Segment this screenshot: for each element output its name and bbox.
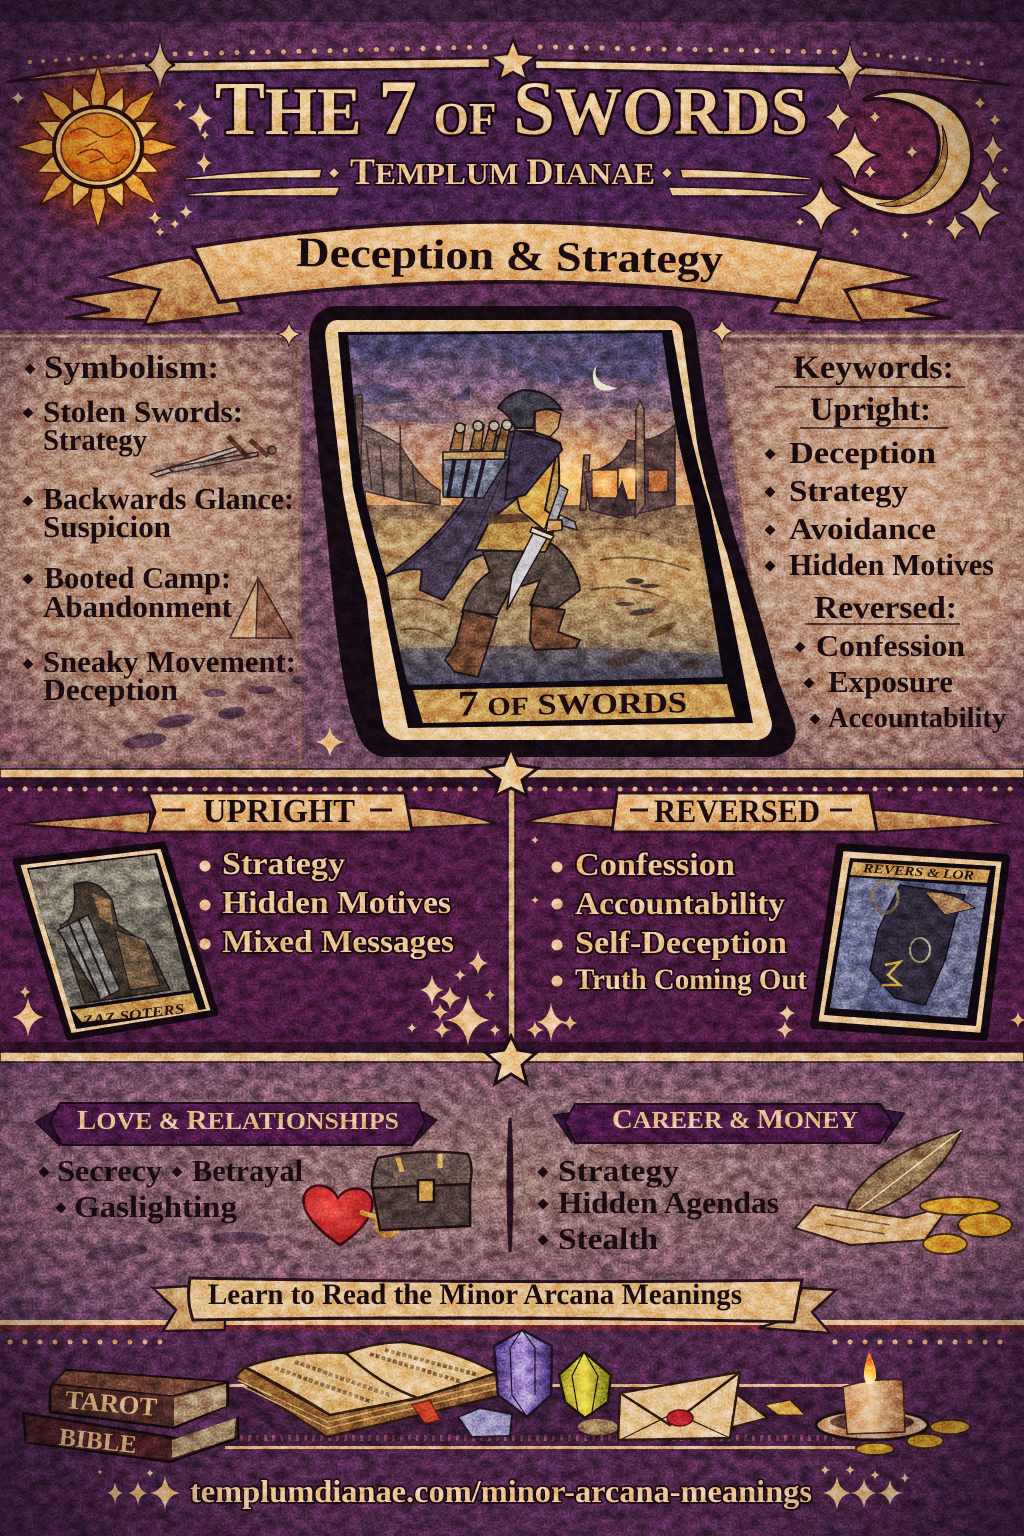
icon: Tarot book: TAROT [64, 1385, 158, 1422]
panel: keywords [709, 318, 1024, 764]
reversed list: Truth Coming Out [575, 963, 807, 996]
url line [97, 1465, 910, 1510]
icon: footprints [122, 676, 308, 751]
hooded figure [60, 882, 170, 1003]
footprints on ground [604, 578, 705, 671]
love banner: LOVE & RELATIONSHIPS [77, 1105, 399, 1135]
footprints [86, 1232, 270, 1263]
icon: gold nuggets [578, 1419, 618, 1435]
sky [348, 333, 695, 510]
reversed list: Self-Deception [575, 924, 787, 960]
icon: sealed envelope [618, 1372, 768, 1440]
career list: Hidden Agendas [558, 1185, 779, 1220]
vertical divider [508, 785, 515, 1043]
upright list: Mixed Messages [222, 923, 454, 959]
icon: small crystal [458, 1408, 512, 1437]
career list: Strategy [558, 1153, 680, 1188]
scarf [505, 430, 562, 500]
icon: crescent moon [795, 55, 1010, 245]
keyword list: Accountability [828, 702, 1006, 734]
crescent moon in sky [593, 365, 618, 390]
keyword list: Strategy [789, 473, 909, 508]
keyword list: Deception [789, 435, 936, 470]
boots [445, 610, 497, 677]
banner: Deception & Strategy [65, 222, 951, 325]
upright subheading: Upright: [810, 392, 931, 428]
upright list [200, 845, 454, 959]
dagger [507, 485, 577, 610]
icon: stolen swords [150, 436, 280, 477]
upright list: Hidden Motives [222, 884, 451, 920]
icon: Tarot book [50, 1370, 228, 1428]
upright list: Strategy [222, 845, 345, 881]
love banner [35, 1103, 437, 1146]
panel: symbolism [0, 321, 345, 763]
symbolism heading: Symbolism: [44, 350, 219, 386]
face and hood [535, 410, 561, 437]
icon: treasure chest [372, 1152, 472, 1230]
card label band [413, 684, 735, 723]
card illustration [340, 330, 730, 690]
url line: templumdianae.com/minor-arcana-meanings [190, 1473, 812, 1509]
banner: Learn to read: Learn to Read the Minor Arcana Meanings [208, 1278, 742, 1311]
symbolism list [43, 394, 296, 707]
reversed banner: REVERSED [654, 794, 820, 830]
icon: quill and coins [795, 1130, 1012, 1254]
upright banner: UPRIGHT [203, 793, 355, 830]
career banner: CAREER & MONEY [612, 1104, 858, 1134]
ground [350, 505, 730, 690]
career banner [553, 1104, 905, 1143]
subtitle: Templum Dianae: TEMPLUM DIANAE [350, 152, 655, 193]
symbolism list: Abandonment [43, 589, 233, 624]
keyword list: Confession [816, 628, 965, 663]
love list: Secrecy [57, 1153, 163, 1188]
icon: gold trinket [765, 1400, 805, 1415]
keyword list: Avoidance [789, 511, 936, 546]
icon: abandoned tent [230, 578, 292, 638]
reversed list: Confession [575, 846, 735, 882]
subtitle: Templum Dianae [185, 152, 812, 196]
sun side sparkles [11, 91, 213, 237]
small card: upright [16, 845, 215, 1037]
icon: candle [816, 1352, 970, 1455]
banner: Learn to read [153, 1278, 836, 1333]
reversed sparkles [526, 836, 1024, 1042]
small card: reversed: REVERS & LOR [861, 860, 975, 883]
reversed list: Accountability [575, 885, 785, 921]
banner: Deception & Strategy: Deception & Strategy [296, 230, 724, 283]
love list: Gaslighting [74, 1189, 238, 1224]
icon: sun [0, 47, 198, 247]
icon: heart and key [304, 1185, 399, 1245]
central divider [508, 1118, 512, 1252]
icon: open book [235, 1342, 503, 1437]
swords on back [443, 420, 512, 498]
keyword list: Hidden Motives [789, 547, 994, 582]
card label text: 7 OF SWORDS [458, 680, 687, 724]
symbolism list: Deception [43, 672, 178, 707]
reversed subheading: Reversed: [814, 589, 957, 625]
symbolism list: Stolen Swords: [43, 394, 243, 429]
inverted figure [870, 885, 965, 1005]
keywords heading: Keywords: [793, 350, 954, 386]
career list [538, 1153, 779, 1256]
small card: upright: ZAZ SOTERS [81, 1002, 185, 1030]
title: THE 7 OF SWORDS [215, 64, 808, 151]
main tarot card [309, 306, 796, 757]
small card: reversed [814, 847, 1006, 1037]
symbolism list: Suspicion [43, 509, 171, 544]
reversed banner [525, 793, 1010, 832]
love list: Betrayal [192, 1153, 303, 1188]
heading rules [775, 387, 965, 624]
icon: yellow crystal [559, 1352, 611, 1418]
legs [462, 540, 580, 615]
tunic [475, 452, 559, 552]
cloak [385, 431, 560, 600]
upright sparkles [12, 950, 501, 1046]
icon: Bible book: BIBLE [58, 1424, 138, 1459]
love list [38, 1153, 303, 1224]
keyword list [789, 435, 1006, 734]
icon: purple crystal [494, 1330, 552, 1417]
footer section [0, 1320, 1024, 1536]
section: upright and reversed panel [0, 778, 1024, 1052]
symbolism list: Booted Camp: [44, 560, 231, 595]
divider bars with stars [0, 748, 1024, 1084]
symbolism bullets [22, 364, 36, 670]
keyword bullets [764, 448, 820, 724]
section: love and career panel [0, 1062, 1024, 1324]
top ornament bar [6, 36, 1010, 97]
keyword list: Exposure [828, 664, 953, 699]
left tents [355, 395, 440, 520]
symbolism list: Backwards Glance: [43, 481, 294, 516]
icon: Bible book [23, 1413, 238, 1462]
symbolism list: Strategy [43, 422, 147, 457]
symbolism list: Sneaky Movement: [43, 644, 296, 679]
right tents with lit windows [580, 400, 675, 518]
reversed list [552, 846, 807, 996]
career list: Stealth [558, 1221, 658, 1256]
patterned table strip [225, 1384, 855, 1449]
upright banner [15, 793, 497, 834]
